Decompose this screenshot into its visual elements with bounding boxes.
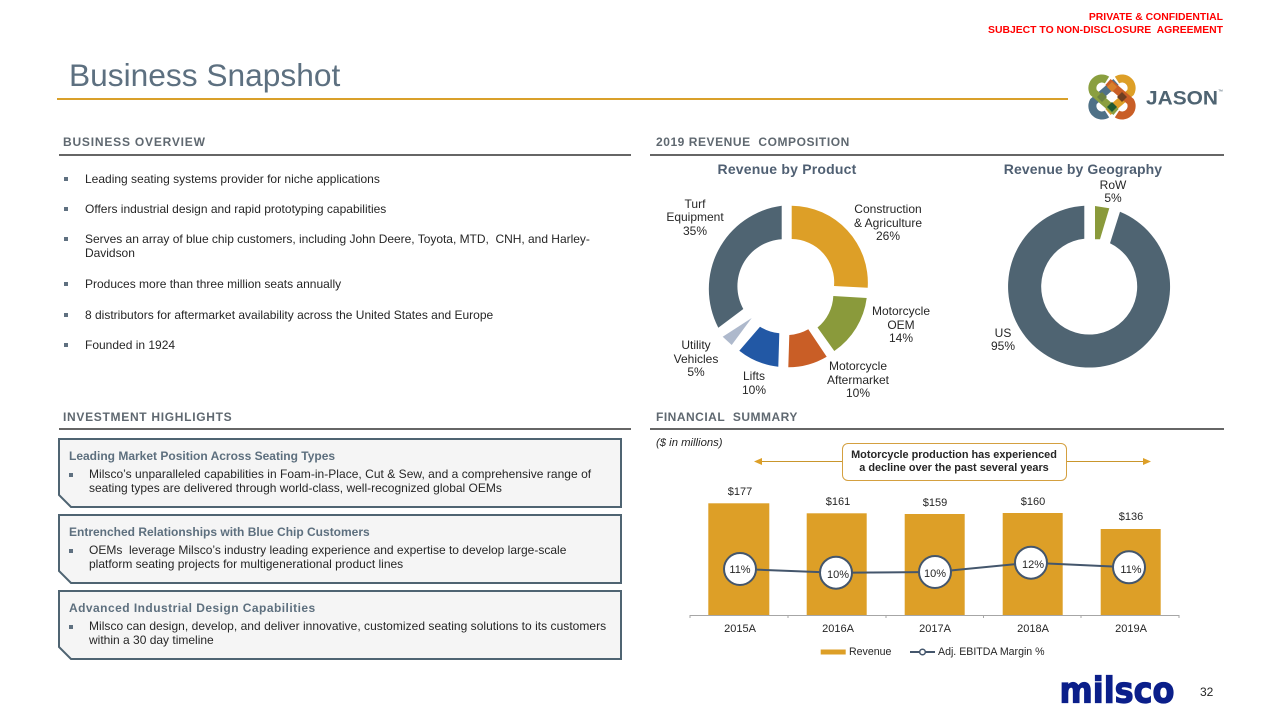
text block: business overview bullets: Founded in 1924 xyxy=(85,338,175,352)
chart: revenue bars with margin line: $136 xyxy=(1119,511,1143,523)
heading: revenue by geography: Revenue by Geography xyxy=(1004,161,1162,177)
label: motorcycle aftermarket: Motorcycle xyxy=(829,359,887,373)
confidentiality notice: SUBJECT TO NON-DISCLOSURE AGREEMENT xyxy=(988,25,1223,36)
text block: business overview bullets: Offers industrial design and rapid prototyping capabilities xyxy=(85,202,386,216)
panel: leading market position: Milsco’s unparalleled capabilities in Foam-in-Place, Cut & Sew, and a comprehensive range of xyxy=(89,467,591,481)
panel: advanced industrial design: within a 30 day timeline xyxy=(89,633,214,647)
legend xyxy=(821,650,846,654)
label: utility vehicles xyxy=(674,338,718,379)
chart: revenue bars with margin line: 2018A xyxy=(1017,623,1050,635)
label: construction: 26% xyxy=(876,229,900,243)
panel: entrenched relationships: platform seating projects for multigenerational product lines xyxy=(89,557,403,571)
text block: business overview bullets: 8 distributors for aftermarket availability across the United States and Europe xyxy=(85,308,493,322)
title: Business Snapshot xyxy=(69,57,340,93)
heading: business overview: BUSINESS OVERVIEW xyxy=(63,135,206,149)
label: US: 95% xyxy=(991,339,1015,353)
chart: revenue bars with margin line: 11% xyxy=(1120,564,1142,576)
label: construction: Construction xyxy=(854,202,922,216)
chart: revenue bars with margin line: $177 xyxy=(728,486,752,498)
panel: advanced industrial design xyxy=(58,590,622,660)
chart: revenue bars with margin line: 2016A xyxy=(822,623,855,635)
panel: leading market position xyxy=(58,438,622,508)
chart: revenue bars with margin line: $161 xyxy=(826,496,850,508)
bars xyxy=(708,503,1161,615)
label: turf equipment xyxy=(666,196,724,238)
heading: revenue composition: 2019 REVENUE COMPOSITION xyxy=(656,135,850,149)
label: construction: & Agriculture xyxy=(854,216,922,230)
label: construction xyxy=(854,202,922,243)
logo: Jason: JASON xyxy=(1146,88,1218,110)
text block: business overview bullets xyxy=(64,172,590,352)
panel: leading market position: Leading Market Position Across Seating Types xyxy=(69,449,335,463)
panel: entrenched relationships: Entrenched Relationships with Blue Chip Customers xyxy=(69,525,370,539)
callout: motorcycle production: a decline over the past several years xyxy=(859,462,1049,474)
label: utility vehicles: Vehicles xyxy=(674,352,718,366)
margin line xyxy=(740,563,1129,573)
label: utility vehicles: 5% xyxy=(687,365,705,379)
label: motorcycle OEM: Motorcycle xyxy=(872,304,930,318)
note: units: ($ in millions) xyxy=(656,437,723,449)
panel: leading market position: seating types are delivered through world-class, well-recognized global OEMs xyxy=(89,481,502,495)
label: lifts xyxy=(742,369,766,396)
label: turf equipment: Equipment xyxy=(666,210,724,224)
label: US: US xyxy=(995,326,1011,340)
chart: revenue bars with margin line: Adj. EBITDA Margin % xyxy=(938,646,1045,658)
panel: entrenched relationships xyxy=(58,514,622,584)
chart: revenue bars with margin line: $160 xyxy=(1021,496,1045,508)
text block: business overview bullets: Serves an array of blue chip customers, including John Deere, Toyota, MTD, CNH, and Harley- xyxy=(85,232,590,246)
panel: entrenched relationships: OEMs leverage Milsco’s industry leading experience and expertise to develop large-scale xyxy=(89,543,566,557)
chart: revenue bars with margin line: 10% xyxy=(827,569,849,581)
heading: financial summary: FINANCIAL SUMMARY xyxy=(656,410,798,424)
label: motorcycle OEM: OEM xyxy=(887,318,915,332)
chart: revenue bars with margin line: 2019A xyxy=(1115,623,1148,635)
chart: revenue bars with margin line: 12% xyxy=(1022,559,1044,571)
text block: business overview bullets: Produces more than three million seats annually xyxy=(85,277,341,291)
confidentiality notice xyxy=(988,12,1223,36)
chart: revenue bars with margin line: $159 xyxy=(923,497,947,509)
text block: business overview bullets: Leading seating systems provider for niche applications xyxy=(85,172,380,186)
panel: advanced industrial design: Milsco can design, develop, and deliver innovative, customized seating solutions to its customers xyxy=(89,619,606,633)
callout: motorcycle production xyxy=(842,442,1066,480)
label: motorcycle aftermarket xyxy=(827,359,889,400)
label: turf equipment: 35% xyxy=(683,224,707,238)
label: lifts: 10% xyxy=(742,382,766,396)
chart: revenue bars with margin line: 10% xyxy=(924,568,946,580)
label: US xyxy=(991,326,1015,353)
label: RoW: RoW xyxy=(1100,178,1126,192)
panel: advanced industrial design: Advanced Industrial Design Capabilities xyxy=(69,601,316,615)
label: turf equipment: Turf xyxy=(685,196,705,210)
chart: revenue bars with margin line: 2015A xyxy=(724,623,757,635)
label: motorcycle aftermarket: Aftermarket xyxy=(827,372,889,386)
chart: revenue bars with margin line: Revenue xyxy=(849,646,892,658)
label: lifts: Lifts xyxy=(743,369,765,383)
label: utility vehicles: Utility xyxy=(681,338,711,352)
chart: revenue bars with margin line: 11% xyxy=(729,564,751,576)
heading: revenue by product: Revenue by Product xyxy=(718,161,856,177)
page number: 32 xyxy=(1200,685,1213,699)
callout: motorcycle production: Motorcycle production has experienced xyxy=(851,448,1057,460)
heading: investment highlights: INVESTMENT HIGHLIGHTS xyxy=(63,410,232,424)
label: motorcycle aftermarket: 10% xyxy=(846,386,870,400)
label: motorcycle OEM xyxy=(872,304,930,345)
label: RoW xyxy=(1100,178,1126,204)
logo: Jason: ™ xyxy=(1218,89,1223,95)
label: motorcycle OEM: 14% xyxy=(889,331,913,345)
text block: business overview bullets: Davidson xyxy=(85,246,135,260)
label: RoW: 5% xyxy=(1104,190,1122,204)
confidentiality notice: PRIVATE & CONFIDENTIAL xyxy=(1089,12,1223,23)
chart: revenue bars with margin line: 2017A xyxy=(919,623,952,635)
logo: Jason xyxy=(1088,74,1223,120)
